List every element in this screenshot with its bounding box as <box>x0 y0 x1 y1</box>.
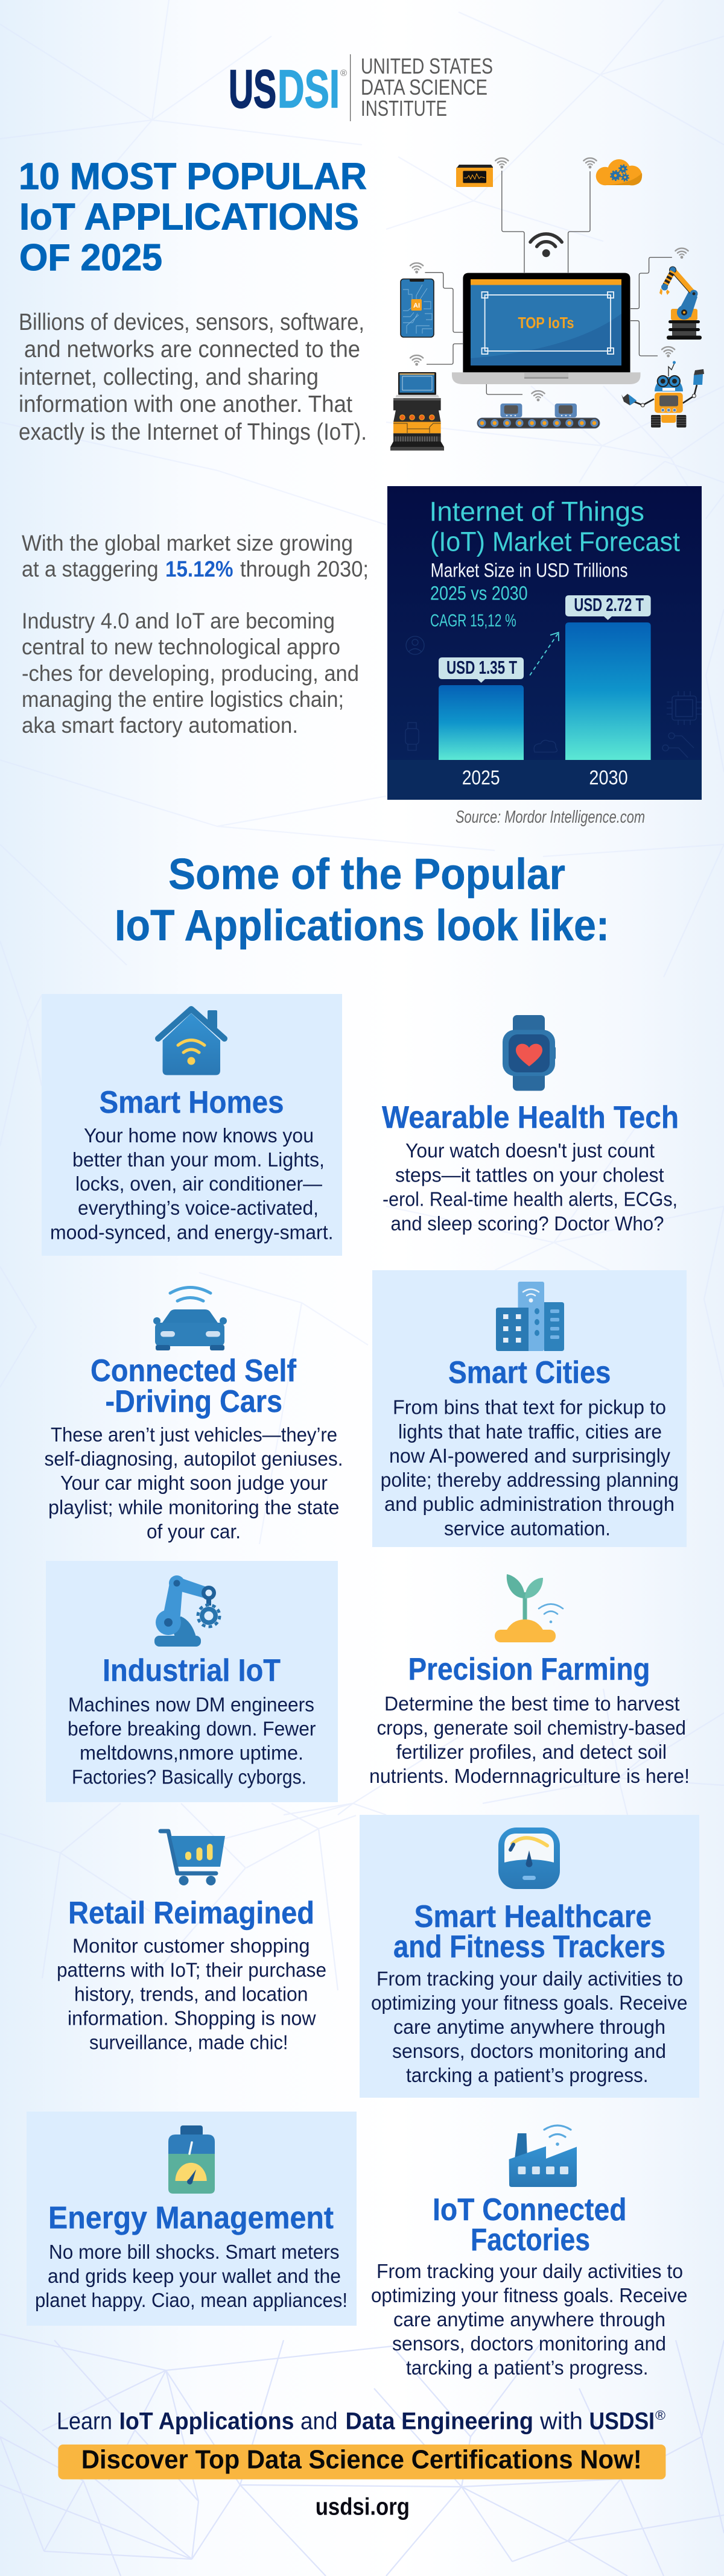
description: playlist; while monitoring the state <box>48 1496 339 1519</box>
call to action button: Discover Top Data Science Certifications Now! <box>81 2445 642 2474</box>
call to action text: ® <box>655 2408 665 2423</box>
icon: smart plant <box>495 1574 563 1642</box>
description <box>371 1967 688 2086</box>
market text block: Industry 4.0 and IoT are becoming <box>22 609 335 633</box>
description: sensors, doctors monitoring and <box>392 2332 666 2355</box>
call to action text: USDSI <box>589 2408 655 2435</box>
call to action text: Learn <box>57 2408 112 2435</box>
description: and sleep scoring? Doctor Who? <box>391 1212 664 1235</box>
description: everything’s voice-activated, <box>78 1197 319 1219</box>
panel: Smart Healthcare and Fitness Trackers <box>360 1815 699 2098</box>
icon: smart city <box>496 1282 564 1351</box>
intro paragraph: exactly is the Internet of Things (IoT). <box>19 419 367 445</box>
description: polite; thereby addressing planning <box>381 1469 679 1491</box>
market text block: 15.12% <box>165 557 233 581</box>
call to action text <box>57 2408 665 2435</box>
description: meltdowns,nmore uptime. <box>80 1742 303 1764</box>
title <box>19 156 367 279</box>
source note: Source: Mordor Intelligence.com <box>456 808 645 827</box>
panel: Smart Cities <box>372 1270 687 1547</box>
description <box>57 1935 326 2054</box>
icon: AI phone: AI <box>413 302 420 309</box>
heading: and Fitness Trackers <box>393 1929 665 1964</box>
bar 2025 <box>439 657 524 788</box>
market text block: managing the entire logistics chain; <box>22 687 344 712</box>
bar 2030 <box>565 594 651 788</box>
market text block: With the global market size growing <box>22 531 353 555</box>
description: care anytime anywhere through <box>393 2016 665 2038</box>
description: From tracking your daily activities to <box>376 2260 683 2282</box>
logo mark: USDSI: US <box>229 59 276 119</box>
section heading: Some of the Popular <box>168 850 565 899</box>
call to action text: with <box>539 2408 583 2435</box>
call to action text: Data Engineering <box>345 2408 533 2435</box>
description: From bins that text for pickup to <box>393 1396 666 1419</box>
description: Determine the best time to harvest <box>384 1692 679 1715</box>
call to action text: IoT Applications <box>119 2408 294 2435</box>
website url: usdsi.org <box>316 2493 410 2520</box>
description: crops, generate soil chemistry-based <box>376 1717 686 1739</box>
chart subtitle: Market Size in USD Trillions <box>431 560 628 581</box>
description: Monitor customer shopping <box>72 1935 310 1957</box>
description: care anytime anywhere through <box>393 2308 665 2331</box>
heading: Factories <box>471 2223 590 2258</box>
icon: ECG device <box>456 165 493 187</box>
panel: Energy Management <box>27 2112 357 2326</box>
chart subtitle <box>430 560 628 630</box>
description <box>45 1423 343 1543</box>
market text block: central to new technological appro <box>22 635 340 659</box>
intro paragraph: internet, collecting, and sharing <box>19 364 319 390</box>
logo wordmark: DATA SCIENCE <box>361 75 487 100</box>
description: From tracking your daily activities to <box>376 1967 683 1990</box>
description: fertilizer profiles, and detect soil <box>396 1741 667 1763</box>
icon: cloud with gears <box>596 159 642 186</box>
description: Machines now DM engineers <box>68 1694 314 1716</box>
icon: health gauge <box>498 1828 560 1889</box>
description: tarcking a patient’s progress. <box>406 2356 648 2379</box>
market text block <box>22 531 369 738</box>
chart title: Internet of Things <box>430 496 644 527</box>
section heading <box>115 850 609 950</box>
connector lines <box>425 171 672 394</box>
heading <box>91 1353 297 1419</box>
icon: smartwatch <box>503 1015 556 1090</box>
description: optimizing your fitness goals. Receive <box>371 2284 688 2306</box>
heading: Smart Homes <box>99 1085 284 1120</box>
description <box>383 1139 678 1235</box>
panel: Industrial IoT <box>46 1561 338 1802</box>
description: planet happy. Ciao, mean appliances! <box>35 2289 348 2311</box>
description: -erol. Real-time health alerts, ECGs, <box>383 1188 678 1210</box>
description <box>369 1692 690 1787</box>
market text block: through 2030; <box>240 557 369 581</box>
description: now AI-powered and surprisingly <box>389 1445 670 1467</box>
bar 2030: 2030 <box>589 766 628 788</box>
illustration: IoT network <box>390 158 704 451</box>
icon: industrial robot <box>154 1575 220 1647</box>
heading: Industrial IoT <box>103 1653 281 1688</box>
panel: Precision Farming <box>369 1574 690 1787</box>
description <box>371 2260 688 2379</box>
intro paragraph: information with one another. That <box>19 391 352 417</box>
icon: robotic arm <box>659 267 702 340</box>
logo <box>229 54 493 121</box>
description: tarcking a patient’s progress. <box>406 2064 648 2086</box>
icon: AI phone <box>401 279 434 337</box>
heading: -Driving Cars <box>105 1384 282 1419</box>
panel: Connected Self-Driving Cars <box>45 1287 343 1543</box>
description: mood-synced, and energy-smart. <box>50 1221 333 1244</box>
description: optimizing your fitness goals. Receive <box>371 1992 688 2014</box>
description: surveillance, made chic! <box>89 2031 288 2054</box>
intro paragraph: Billions of devices, sensors, software, <box>19 309 364 335</box>
description: Your home now knows you <box>84 1124 314 1147</box>
intro paragraph: and networks are connected to the <box>24 337 360 362</box>
description: and grids keep your wallet and the <box>48 2265 341 2287</box>
market text block: -ches for developing, producing, and <box>22 661 359 686</box>
description: Your car might soon judge your <box>60 1472 328 1494</box>
heading: Smart Healthcare <box>414 1899 652 1934</box>
icon: central laptop: TOP IoTs <box>518 314 574 332</box>
logo mark: USDSI: ® <box>340 68 347 78</box>
logo wordmark: INSTITUTE <box>361 96 447 121</box>
icon: shopping cart <box>160 1831 225 1885</box>
description: steps—it tattles on your cholest <box>395 1164 664 1186</box>
description <box>50 1124 333 1244</box>
chart panel: IoT market forecast <box>387 486 702 800</box>
intro paragraph <box>19 309 367 445</box>
heading <box>433 2192 626 2258</box>
chart title: (IoT) Market Forecast <box>430 527 680 557</box>
logo mark: USDSI: DSI <box>278 59 340 119</box>
panel: IoT Connected Factories <box>371 2125 688 2379</box>
chart subtitle: 2025 vs 2030 <box>430 583 528 604</box>
description: No more bill shocks. Smart meters <box>49 2241 339 2263</box>
icon: machine with laptop <box>390 372 444 451</box>
logo wordmark: UNITED STATES <box>361 54 493 78</box>
description <box>381 1396 679 1539</box>
description: These aren’t just vehicles—they’re <box>51 1423 337 1446</box>
description <box>35 2241 348 2311</box>
bar 2030: USD 2.72 T <box>574 594 644 615</box>
description: information. Shopping is now <box>68 2007 316 2030</box>
icon: conveyor belt <box>477 403 600 428</box>
description <box>68 1694 316 1788</box>
description: before breaking down. Fewer <box>68 1718 316 1740</box>
icon: central laptop <box>452 273 641 384</box>
arrow: growth <box>530 633 559 676</box>
market text block: at a staggering <box>22 557 158 581</box>
heading: Energy Management <box>48 2200 334 2235</box>
description: patterns with IoT; their purchase <box>57 1959 326 1981</box>
description: locks, oven, air conditioner— <box>75 1172 322 1195</box>
panel: Retail Reimagined <box>57 1831 326 2054</box>
section heading: IoT Applications look like: <box>115 902 609 950</box>
description: better than your mom. Lights, <box>72 1148 325 1171</box>
icon: connected car <box>153 1287 227 1350</box>
heading: Precision Farming <box>408 1652 650 1687</box>
icon: smart home <box>158 1009 224 1075</box>
chart title <box>430 496 680 557</box>
description: lights that hate traffic, cities are <box>398 1420 662 1443</box>
heading: Connected Self <box>91 1353 297 1388</box>
chart subtitle: CAGR 15,12 % <box>430 611 516 630</box>
bar 2025: 2025 <box>462 766 500 788</box>
description: self-diagnosing, autopilot geniuses. <box>45 1448 343 1470</box>
description: nutrients. Modernnagriculture is here! <box>369 1765 690 1787</box>
market text block: aka smart factory automation. <box>22 713 298 738</box>
icon: small wifi signals <box>410 158 688 401</box>
icon: large wifi <box>530 234 562 257</box>
heading: IoT Connected <box>433 2192 626 2227</box>
heading: Smart Cities <box>448 1355 611 1390</box>
panel: Wearable Health Tech <box>382 1015 679 1235</box>
icon: connected factory <box>509 2125 577 2187</box>
title: 10 MOST POPULAR <box>19 156 367 198</box>
description: of your car. <box>147 1521 241 1543</box>
heading <box>393 1899 665 1964</box>
logo wordmark <box>361 54 493 121</box>
icon: robot <box>621 361 704 428</box>
description: history, trends, and location <box>74 1983 308 2005</box>
description: sensors, doctors monitoring and <box>392 2040 666 2062</box>
description: Factories? Basically cyborgs. <box>72 1766 306 1788</box>
icon: battery meter <box>168 2125 215 2194</box>
call to action text: and <box>300 2408 338 2435</box>
title: IoT APPLICATIONS <box>19 197 359 238</box>
description: Your watch doesn't just count <box>405 1139 655 1162</box>
logo mark: USDSI <box>229 59 347 119</box>
panel: Smart Homes <box>42 994 342 1256</box>
title: OF 2025 <box>19 237 162 279</box>
heading: Retail Reimagined <box>68 1896 314 1931</box>
description: and public administration through <box>384 1493 675 1515</box>
heading: Wearable Health Tech <box>382 1100 679 1135</box>
bar 2025: USD 1.35 T <box>446 657 517 678</box>
description: service automation. <box>444 1517 611 1539</box>
